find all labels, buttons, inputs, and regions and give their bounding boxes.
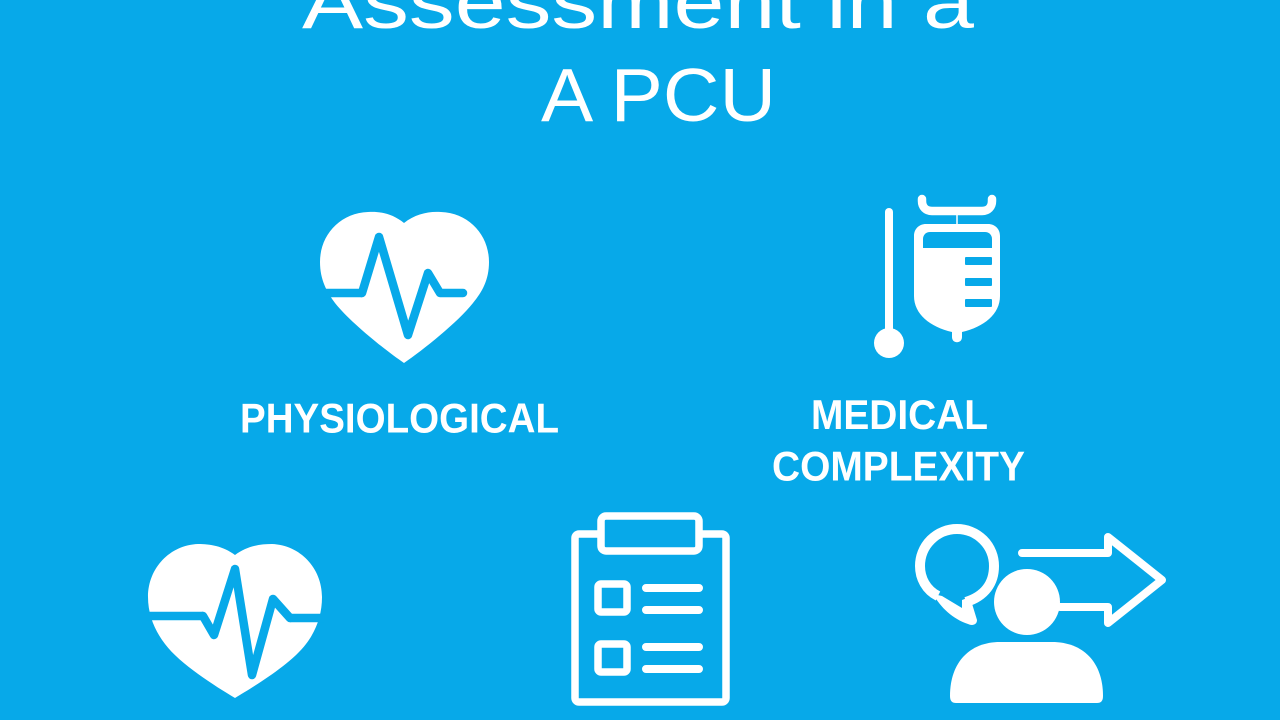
title bbox=[302, 0, 974, 137]
label: medical complexity bbox=[772, 391, 1025, 490]
label: physiological: PHYSIOLOGICAL bbox=[240, 394, 559, 442]
icon: clipboard checklist bbox=[575, 516, 726, 702]
icon: IV drip bag and pole bbox=[874, 199, 1000, 358]
icon: heart with pulse, physiological bbox=[320, 212, 489, 363]
icon: person with speech bubble and arrow bbox=[920, 529, 1162, 703]
title: A PCU bbox=[541, 53, 776, 137]
label: medical complexity: COMPLEXITY bbox=[772, 442, 1025, 490]
label: medical complexity: MEDICAL bbox=[811, 391, 988, 438]
icon: heart with pulse, lower left bbox=[146, 544, 324, 698]
